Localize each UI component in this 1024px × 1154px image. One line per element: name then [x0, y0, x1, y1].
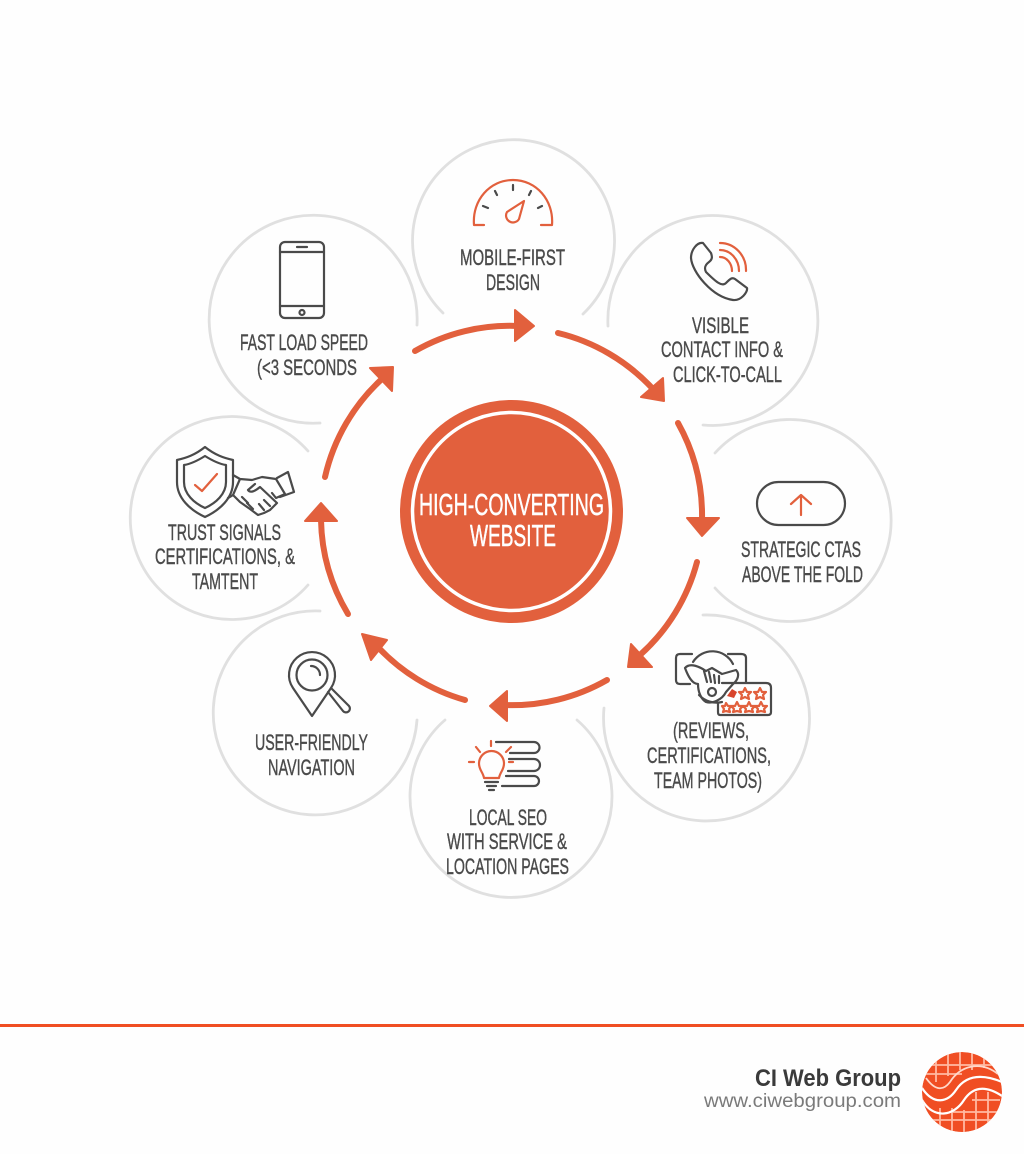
footer rule: [0, 1024, 1024, 1027]
icon: phone with signal: [691, 243, 747, 300]
label: reviews, certifications, team photos: TEAM PHOTOS): [654, 768, 762, 793]
icon: smartphone: [280, 242, 324, 318]
center title: WEBSITE: [470, 518, 556, 553]
label: visible contact info: CONTACT INFO &: [661, 337, 783, 362]
label: strategic CTAs: ABOVE THE FOLD: [742, 562, 863, 587]
arrow: bottom-right to bottom: [490, 680, 607, 721]
label: user-friendly navigation: [255, 730, 368, 780]
label: fast load speed: FAST LOAD SPEED: [240, 330, 368, 355]
icon: map pin with magnifier: [289, 652, 350, 716]
center title: HIGH-CONVERTING: [419, 487, 604, 522]
label: mobile-first design: [460, 245, 565, 295]
label: trust signals: CERTIFICATIONS, &: [155, 544, 295, 569]
label: mobile-first design: DESIGN: [486, 270, 540, 295]
panel: strategic CTAs: [715, 420, 891, 622]
label: local SEO: WITH SERVICE &: [447, 829, 567, 854]
panel: mobile-first design: [413, 140, 615, 314]
label: reviews, certifications, team photos: (REVIEWS,: [673, 718, 749, 743]
icon: speedometer: [474, 180, 552, 225]
arrow: top-left to top: [415, 310, 534, 351]
label: visible contact info: [661, 313, 783, 387]
label: fast load speed: [240, 330, 368, 380]
logo: [922, 1052, 1002, 1132]
icon: shield and handshake: [177, 447, 294, 517]
arrow: left to top-left: [325, 367, 393, 477]
brand url: www.ciwebgroup.com: [703, 1090, 901, 1112]
center title: [419, 487, 604, 553]
panel: user-friendly navigation: [213, 611, 417, 815]
label: reviews, certifications, team photos: CERTIFICATIONS,: [647, 743, 771, 768]
label: local SEO: LOCAL SEO: [469, 805, 547, 830]
panel: reviews and certifications: [604, 615, 810, 821]
icon: reviews, hand and rating stars: [676, 651, 771, 715]
label: strategic CTAs: STRATEGIC CTAS: [741, 537, 861, 562]
label: mobile-first design: MOBILE-FIRST: [460, 245, 565, 270]
panel: trust signals: [130, 416, 308, 620]
icon: CTA button with arrow: [757, 482, 845, 525]
arrow: top to top-right: [558, 333, 664, 401]
center circle: high-converting website: [400, 400, 623, 623]
label: local SEO: [446, 805, 569, 879]
label: trust signals: TRUST SIGNALS: [168, 520, 281, 545]
panel: visible contact info: [608, 215, 818, 425]
label: user-friendly navigation: NAVIGATION: [268, 755, 355, 780]
label: local SEO: LOCATION PAGES: [446, 854, 569, 879]
arrow: right to bottom-right: [628, 562, 697, 667]
panel: local SEO: [410, 720, 612, 897]
arrow: bottom to bottom-left: [362, 634, 465, 700]
panel: fast load speed: [209, 215, 417, 423]
label: visible contact info: VISIBLE: [692, 313, 749, 338]
label: reviews, certifications, team photos: [647, 718, 771, 793]
icon: light bulb and list lines: [469, 741, 540, 790]
label: trust signals: [155, 520, 295, 594]
cycle arrows: [305, 310, 719, 721]
arrow: top-right to right: [678, 423, 719, 536]
label: fast load speed: (<3 SECONDS: [257, 355, 357, 380]
footer brand: [703, 1065, 901, 1112]
label: user-friendly navigation: USER-FRIENDLY: [255, 730, 368, 755]
label: strategic CTAs: [741, 537, 863, 587]
label: visible contact info: CLICK-TO-CALL: [673, 362, 782, 387]
label: trust signals: TAMTENT: [192, 569, 258, 594]
arrow: bottom-left to left: [305, 503, 348, 614]
brand name: CI Web Group: [755, 1065, 901, 1092]
